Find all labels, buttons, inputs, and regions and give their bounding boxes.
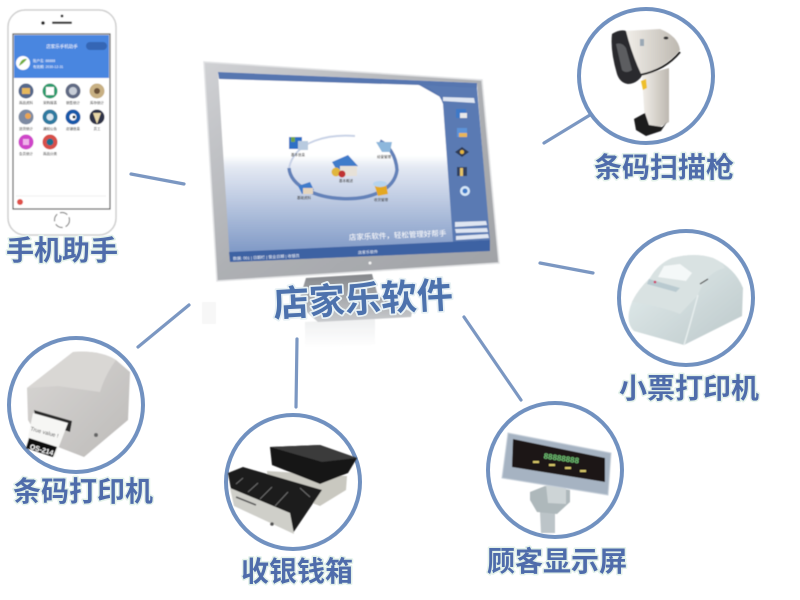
label: label printer: 条码打印机 (13, 476, 153, 507)
phone app icons: 员工 (94, 127, 101, 131)
top right icon: 经营管理 (377, 154, 391, 159)
monitor stand and reflection (202, 274, 412, 348)
top left icon: 基本信息 (291, 152, 305, 157)
phone app icons: 商品资料 (19, 100, 33, 105)
phone screen: 账户名: 88888 (33, 58, 55, 63)
center house icon: 基本概述 (339, 178, 353, 183)
phone screen: 有效期: 2030-12-31 (33, 64, 63, 69)
side panel buttons (443, 97, 489, 240)
bottom left icon: 基础资料 (297, 195, 311, 200)
bottom right icon: 收货管理 (374, 197, 388, 202)
screen footer bar: 数据: 001 | 日期栏 | 营业日期 | 收银员 (233, 252, 300, 261)
screen footer bar: 店家乐软件 (358, 248, 378, 255)
phone app icons: 销售统计 (66, 100, 80, 105)
screen title bar (218, 72, 477, 98)
screen slogan: 店家乐软件，轻松管理好帮手 (349, 228, 447, 242)
phone app icons: 采购报表 (43, 100, 57, 105)
software workflow ring (289, 136, 397, 202)
cash drawer illustration (228, 445, 357, 534)
phone screen: 店家乐手机助手 (46, 43, 78, 50)
customer display (488, 403, 622, 537)
software title: 店家乐软件 (272, 274, 454, 325)
receipt printer (619, 231, 753, 365)
printed label (26, 413, 68, 457)
phone app icons: 进货统计 (19, 126, 33, 131)
phone app icons: 库存统计 (90, 100, 104, 105)
printed label: True value ! (30, 426, 59, 440)
printed label: OS-214 (29, 444, 54, 457)
connector lines (131, 115, 593, 407)
display digits: 88888888 (543, 452, 580, 466)
label printer (9, 338, 143, 472)
phone home button (54, 212, 70, 228)
monitor bezel (204, 62, 499, 281)
side panel icons (455, 109, 470, 196)
phone assistant (8, 10, 116, 235)
barcode scanner (579, 9, 713, 143)
monitor screen (218, 72, 490, 262)
phone app icons: 店铺信息 (66, 126, 80, 131)
phone app icons: 通知公告 (43, 126, 57, 131)
label: cash drawer: 收银钱箱 (241, 556, 353, 587)
phone app icons: 会员统计 (19, 151, 33, 156)
label: customer display: 顾客显示屏 (487, 546, 627, 577)
receipt printer illustration (629, 255, 743, 345)
phone screen (13, 34, 110, 209)
screen footer bar (229, 240, 490, 262)
screen side panel (418, 85, 490, 242)
label: phone assistant: 手机助手 (6, 235, 118, 266)
phone app icons (18, 84, 104, 156)
phone app icons: 商品分类 (43, 151, 57, 156)
central monitor (202, 62, 499, 348)
phone body (8, 10, 116, 235)
cash drawer (226, 415, 360, 549)
scanner illustration (612, 29, 680, 136)
label printer illustration (26, 352, 130, 457)
label: barcode scanner: 条码扫描枪 (594, 152, 734, 183)
label: receipt printer: 小票打印机 (619, 373, 759, 404)
